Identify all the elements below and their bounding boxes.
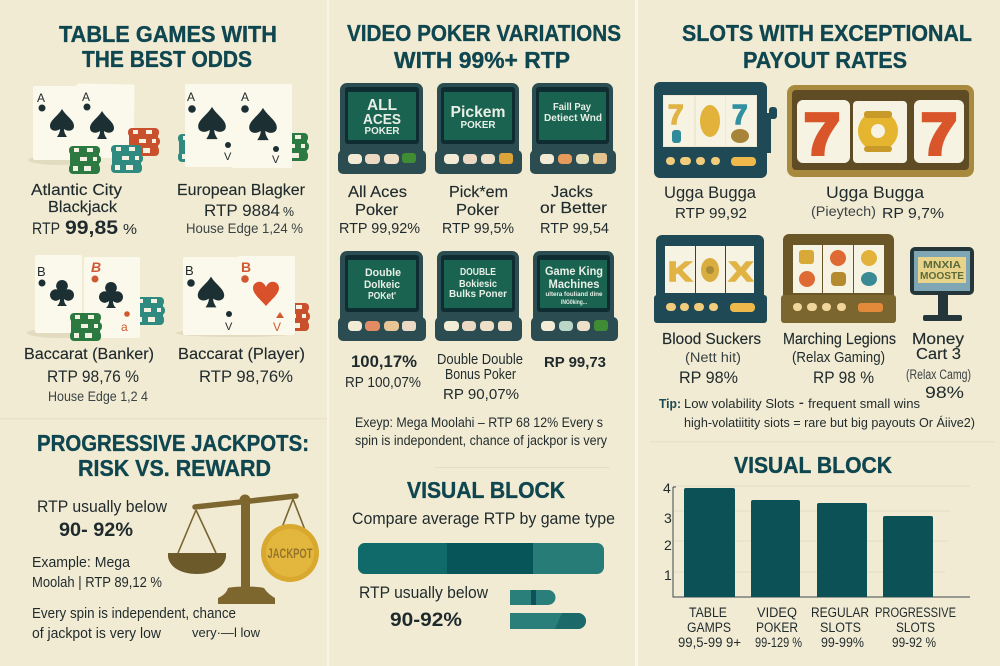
- text: Ugga Bugga Playtech: (Pieytech): [811, 204, 876, 219]
- text: regular slots label: REGULAR: [811, 605, 869, 620]
- heading: progressive jackpots: [37, 430, 309, 481]
- text: Baccarat Banker: [24, 346, 154, 404]
- text: Atlantic City Blackjack: 99,85: [65, 218, 118, 239]
- icon: monitor, Money Cart: MOOSTE: [920, 271, 964, 282]
- text: example: Example: Mega: [32, 554, 131, 571]
- text: Ugga Bugga Playtech: RP 9,7%: [882, 205, 944, 222]
- heading: visual block center: VISUAL BLOCK: [407, 477, 565, 503]
- icon: machine, Jacks or Better: Faill Pay: [553, 101, 591, 113]
- panel: visual block, RTP comparison: [352, 477, 615, 631]
- icon: cards and chips, Atlantic City Blackjack: A: [82, 90, 90, 104]
- text: Ugga Bugga Playtech: [811, 183, 944, 222]
- text: table games label: 99,5-99 9+: [678, 635, 741, 650]
- icon: cards and chips, European Blackjack: [178, 84, 309, 168]
- text: Double Deuces RTP: RP 100,07%: [345, 374, 421, 391]
- icon: cards and chips, Baccarat Banker: a: [121, 320, 128, 334]
- icon: machine, Pickem Poker: POKER: [460, 120, 496, 131]
- text: Blood Suckers: RP 98%: [679, 368, 738, 387]
- bar chart: RTP by game type: 1: [664, 567, 672, 583]
- icon: machine, Jacks or Better: [530, 83, 616, 174]
- text: Atlantic City Blackjack: Blackjack: [48, 199, 118, 216]
- icon: balance scale with jackpot coin: [168, 494, 319, 604]
- icon: machine, Game King: Machines: [548, 279, 600, 291]
- icon: cards and chips, Atlantic City Blackjack: [28, 83, 160, 174]
- icon: balance scale with jackpot coin: JACKPOT: [268, 545, 313, 561]
- text: Marching Legions: RP 98 %: [813, 368, 874, 387]
- text: Blood Suckers: (Nett hit): [685, 350, 741, 365]
- text: All Aces Poker: RTP 99,92%: [339, 220, 420, 237]
- icon: machine, Game King: ultera fouliand dine: [546, 291, 603, 298]
- icon: machine, Jacks or Better: Detiect Wnd: [544, 112, 602, 124]
- text: Double Deuces RTP: [345, 352, 421, 391]
- text: Atlantic City Blackjack: Atlantic City: [31, 182, 122, 199]
- icon: slot machine, Ugga Bugga gold: [787, 85, 974, 177]
- text: example note: spin is indepondent, chance of jackpor is very: [355, 433, 607, 448]
- text: Baccarat Player: RTP 98,76%: [199, 367, 293, 386]
- text: Money Cart: Money: [912, 331, 964, 348]
- panel: slots: [654, 20, 975, 430]
- text: Atlantic City Blackjack: %: [123, 221, 137, 238]
- icon: cards and chips, Baccarat Player: [176, 256, 310, 337]
- text: regular slots label: SLOTS: [820, 620, 861, 635]
- heading: table games: TABLE GAMES WITH: [59, 21, 277, 47]
- icon: machine, Double Double Bonus: Bulks Poner: [449, 288, 507, 300]
- text: Baccarat Player: Baccarat (Player): [178, 346, 305, 363]
- text: European Blackjack: RTP 9884: [204, 201, 280, 220]
- icon: cards and chips, Baccarat Player: B: [241, 259, 251, 275]
- text: RTP below center: [359, 583, 489, 631]
- text: Jacks or Better: RTP 99,54: [540, 220, 609, 237]
- icon: machine, All Aces Poker: ALL: [367, 97, 397, 114]
- icon: machine, All Aces Poker: ACES: [363, 111, 401, 128]
- text: regular slots label: [811, 605, 869, 650]
- text: RTP below center: 90-92%: [390, 610, 462, 631]
- heading: slots: SLOTS WITH EXCEPTIONAL: [682, 20, 972, 46]
- icon: machine, Game King: [531, 251, 618, 341]
- heading: progressive jackpots: PROGRESSIVE JACKPOTS:: [37, 430, 309, 456]
- text: tip: Low volability Slots ⁃ frequent small wins: [684, 397, 920, 411]
- icon: cards and chips, European Blackjack: A: [187, 90, 195, 104]
- text: Atlantic City Blackjack: [31, 182, 137, 239]
- text: Pick'em Poker: [442, 184, 514, 237]
- text: tip: Tip:: [659, 397, 681, 411]
- icon: slot machine, Blood Suckers: K: [668, 256, 692, 287]
- icon: slot machine, Blood Suckers: [654, 235, 767, 323]
- text: Ugga Bugga: RTP 99,92: [675, 205, 747, 222]
- text: example: [32, 554, 162, 591]
- text: table games label: GAMPS: [687, 620, 731, 635]
- text: Blood Suckers: Blood Suckers: [662, 331, 761, 348]
- text: Jacks or Better: Jacks: [551, 184, 593, 201]
- icon: cards and chips, European Blackjack: V: [224, 151, 232, 163]
- text: Pick'em Poker: Pick*em: [449, 184, 508, 201]
- text: Money Cart: Cart 3: [916, 346, 961, 363]
- text: Atlantic City Blackjack: RTP: [32, 219, 60, 238]
- text: RTP below center: RTP usually below: [359, 583, 489, 602]
- icon: monitor, Money Cart: [910, 247, 974, 321]
- text: table games label: TABLE: [689, 605, 727, 620]
- text: Marching Legions: [783, 331, 896, 387]
- text: Double Deuces RTP: 100,17%: [351, 352, 417, 371]
- text: Blood Suckers: [662, 331, 761, 387]
- icon: machine, Double Deuces: Double: [365, 267, 401, 279]
- panel: video poker: [338, 20, 621, 448]
- text: progressive slots label: [875, 605, 956, 650]
- text: European Blackjack: [177, 182, 306, 236]
- heading: slots: [682, 20, 972, 73]
- text: example note: Exeyp: Mega Moolahi – RTP 68 12% Every s: [355, 415, 603, 430]
- bar chart: RTP by game type: [663, 480, 970, 597]
- heading: table games: THE BEST ODDS: [82, 46, 252, 72]
- text: Jacks or Better: [540, 184, 609, 237]
- text: RTP below: [37, 497, 168, 541]
- text: Pick'em Poker: RTP 99,5%: [442, 220, 514, 237]
- text: All Aces Poker: Poker: [355, 202, 399, 219]
- text: table games label: [678, 605, 741, 650]
- icon: machine, Double Deuces: POKet': [368, 291, 396, 302]
- text: independence note: of jackpot is very low: [32, 625, 161, 642]
- text: Double Double Bonus Poker: Double Double: [437, 351, 523, 368]
- icon: machine, Double Double Bonus: [435, 251, 522, 341]
- icon: slot machine, Ugga Bugga teal: [654, 82, 777, 178]
- icon: machine, Game King: Game King: [545, 266, 603, 278]
- heading: video poker: WITH 99%+ RTP: [394, 47, 570, 73]
- text: progressive slots label: SLOTS: [896, 620, 935, 635]
- icon: machine, All Aces Poker: [338, 83, 426, 174]
- text: Baccarat Banker: Baccarat (Banker): [24, 346, 154, 363]
- icon: machine, Pickem Poker: Pickem: [450, 104, 506, 121]
- text: independence note: [32, 605, 261, 642]
- heading: table games: [59, 21, 277, 72]
- icon: cards and chips, Atlantic City Blackjack: A: [37, 91, 45, 105]
- bar chart: RTP by game type: 3: [664, 510, 672, 526]
- icon: cards and chips, Baccarat Player: V: [225, 321, 233, 333]
- text: video poker label: 99-129 %: [755, 635, 802, 650]
- text: video poker label: VIDEQ: [757, 605, 797, 620]
- text: Double Double Bonus Poker: [437, 351, 523, 403]
- text: tip: [659, 397, 975, 430]
- text: video poker label: POKER: [756, 620, 798, 635]
- icon: cards and chips, Baccarat Banker: B: [91, 259, 101, 275]
- bar chart: RTP by game type: 2: [664, 537, 672, 553]
- icon: slot machine, Ugga Bugga teal: 7: [732, 99, 748, 130]
- text: Marching Legions: (Relax Gaming): [792, 349, 885, 366]
- text: All Aces Poker: [339, 184, 420, 237]
- icon: slot machine, Ugga Bugga gold: 7: [921, 102, 957, 167]
- icon: slot machine, Blood Suckers: X: [729, 256, 753, 287]
- icon: slot machine, Ugga Bugga teal: 7: [668, 99, 684, 130]
- text: European Blackjack: European Blagker: [177, 182, 306, 199]
- icon: machine, All Aces Poker: POKER: [364, 126, 400, 137]
- text: Money Cart: (Relax Camg): [906, 367, 971, 382]
- chart: stacked RTP bar: [358, 543, 604, 574]
- text: European Blackjack: %: [283, 205, 294, 219]
- text: Ugga Bugga Playtech: Ugga Bugga: [826, 183, 925, 202]
- panel: table games: [24, 21, 310, 404]
- heading: slots: PAYOUT RATES: [743, 47, 907, 73]
- icon: machine, Double Deuces: [338, 251, 426, 341]
- icon: machine, Double Deuces: Dolkeic: [364, 279, 400, 291]
- heading: video poker: VIDEO POKER VARIATIONS: [347, 20, 621, 46]
- text: independence note: Every spin is independent, chance: [32, 605, 236, 622]
- panel: progressive jackpots: [32, 430, 319, 642]
- icon: cards and chips, European Blackjack: V: [272, 154, 280, 166]
- heading: visual block right: VISUAL BLOCK: [734, 452, 892, 478]
- text: progressive slots label: PROGRESSIVE: [875, 605, 956, 620]
- text: Baccarat Banker: RTP 98,76 %: [47, 367, 139, 386]
- text: Money Cart: 98%: [925, 383, 964, 402]
- text: Ugga Bugga: [664, 183, 757, 222]
- text: Double Double Bonus Poker: RP 90,07%: [443, 386, 519, 403]
- icon: monitor, Money Cart: MNXIA: [923, 260, 961, 271]
- text: independence note: very·—l low: [192, 626, 261, 640]
- text: example: Moolah | RTP 89,12 %: [32, 574, 162, 591]
- text: tip: high-volatiitity siots = rare but big payouts Or Áiive2): [684, 415, 975, 430]
- text: Double Double Bonus Poker: Bonus Poker: [445, 366, 516, 383]
- heading: progressive jackpots: RISK VS. REWARD: [78, 455, 271, 481]
- text: RTP below: 90- 92%: [59, 520, 133, 541]
- text: All Aces Poker: All Aces: [348, 184, 407, 201]
- icon: machine, Game King: ING0king...: [561, 299, 587, 306]
- icon: slot machine, Marching Legions: [781, 234, 896, 323]
- text: video poker label: [755, 605, 802, 650]
- heading: video poker: [347, 20, 621, 73]
- text: Game King RTP: RP 99,73: [544, 354, 606, 371]
- chart: small RTP bars: [510, 590, 586, 629]
- text: example note: [355, 415, 607, 448]
- text: Ugga Bugga: Ugga Bugga: [664, 183, 757, 202]
- bar chart: RTP by game type: 4: [663, 480, 671, 496]
- icon: machine, Double Double Bonus: Bokiesic: [459, 278, 497, 290]
- icon: cards and chips, Baccarat Banker: B: [37, 264, 46, 279]
- text: regular slots label: 99-99%: [821, 635, 864, 650]
- text: Pick'em Poker: Poker: [456, 202, 500, 219]
- text: RTP below: RTP usually below: [37, 497, 168, 516]
- icon: cards and chips, Baccarat Player: B: [185, 263, 194, 278]
- panel: visual block, bar chart: [663, 452, 970, 650]
- icon: cards and chips, Baccarat Player: V: [273, 320, 281, 334]
- text: Baccarat Banker: House Edge 1,2 4: [48, 389, 148, 404]
- text: Jacks or Better: or Better: [540, 200, 608, 217]
- icon: machine, Double Double Bonus: DOUBLE: [460, 266, 496, 278]
- text: Money Cart: [906, 331, 971, 402]
- text: Baccarat Player: [178, 346, 305, 386]
- text: compare caption: Compare average RTP by game type: [352, 509, 615, 528]
- text: European Blackjack: House Edge 1,24 %: [186, 221, 303, 236]
- icon: machine, Pickem Poker: [435, 83, 522, 174]
- icon: cards and chips, European Blackjack: A: [241, 90, 249, 104]
- text: progressive slots label: 99-92 %: [892, 635, 936, 650]
- icon: cards and chips, Baccarat Banker: [27, 255, 165, 341]
- text: Marching Legions: Marching Legions: [783, 331, 896, 348]
- icon: slot machine, Ugga Bugga gold: 7: [804, 102, 840, 167]
